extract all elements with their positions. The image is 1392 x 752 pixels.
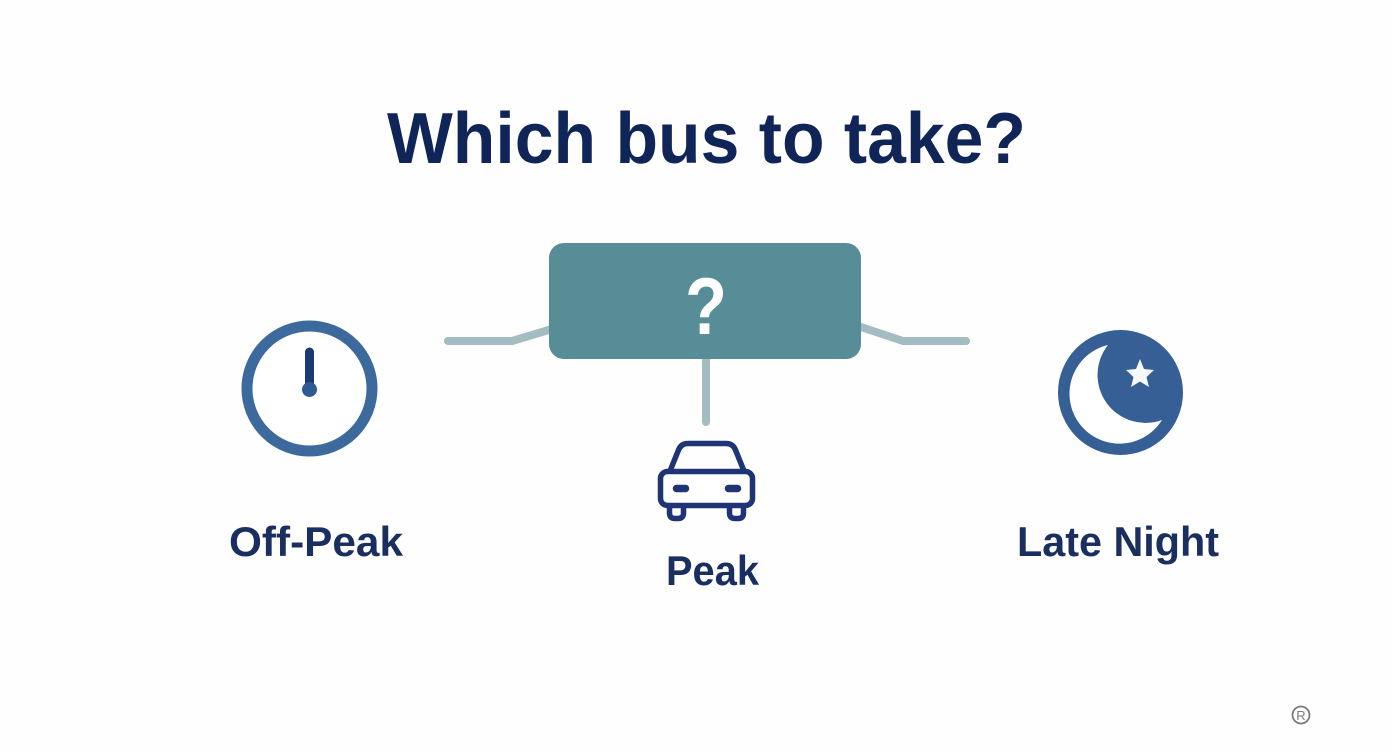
icon: registered mark: R — [1296, 708, 1306, 723]
arrow: connector to Late Night — [858, 326, 966, 341]
arrow: connector to Off-Peak — [448, 329, 552, 341]
decision box — [549, 243, 861, 359]
label: Off-Peak: Off-Peak — [229, 518, 404, 565]
icon: clock — [247, 326, 372, 451]
arrow: connector to Peak — [702, 356, 710, 422]
icon: registered mark — [1292, 706, 1310, 724]
label: Late Night: Late Night — [1017, 518, 1219, 565]
icon: car — [660, 444, 752, 518]
title: Which bus to take? — [387, 99, 1026, 179]
question mark: ? — [685, 262, 727, 352]
icon: moon and star — [1058, 330, 1183, 455]
label: Peak: Peak — [666, 547, 760, 594]
